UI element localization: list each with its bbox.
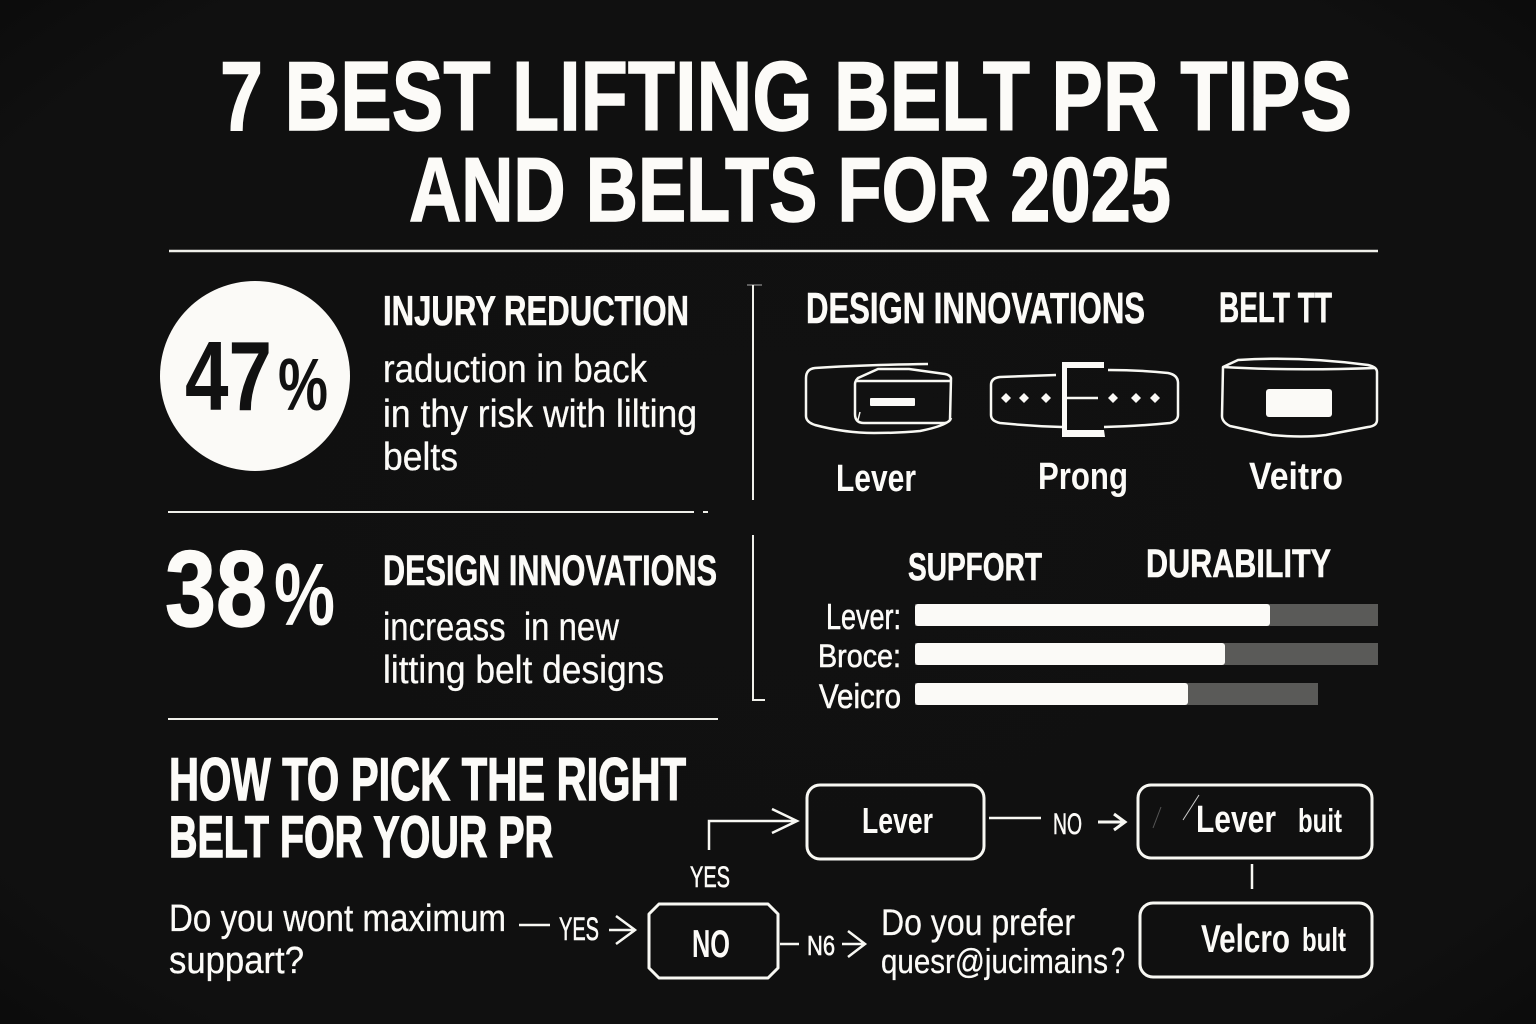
bar: velcro: Veicro	[819, 678, 901, 716]
panel: injury reduction	[160, 281, 697, 479]
heading: design innovations: DESIGN INNOVATIONS	[806, 284, 1145, 333]
box: velcro belt: Velcro	[1201, 918, 1290, 961]
text: innovation description: litting belt designs	[383, 649, 664, 692]
title: AND BELTS FOR 2025	[409, 140, 1171, 241]
stat circle: 47%: 47	[185, 321, 272, 431]
box: lever	[807, 785, 984, 859]
question: maximum support: suppart?	[169, 940, 304, 982]
icon: velcro belt	[1222, 359, 1377, 436]
box: velcro belt: bult	[1302, 921, 1346, 958]
box: lever: Lever	[862, 800, 933, 841]
question: prefer: quesr@jucimains	[881, 943, 1108, 981]
question: maximum support	[169, 898, 506, 982]
heading: belt type: BELT TT	[1219, 284, 1332, 332]
stat: 38%: %	[274, 545, 335, 644]
bar: brace: Broce:	[818, 638, 901, 674]
label: lever: Lever	[836, 458, 916, 500]
text: injury description: in thy risk with lilting	[383, 393, 697, 436]
arrow: no to lever belt: NO	[1053, 808, 1082, 841]
question: prefer: Do you prefer	[881, 902, 1075, 943]
stat: 38%: 38	[165, 528, 267, 649]
heading: support: SUPFORT	[908, 546, 1042, 589]
arrow: yes up to lever	[690, 809, 797, 894]
box: lever belt: Lever	[1196, 799, 1276, 841]
arrow: yes to no box	[519, 911, 635, 947]
panel: flowchart	[169, 746, 1372, 982]
box: no: NO	[692, 923, 730, 966]
bar chart: support and durability	[818, 542, 1378, 716]
bar: lever: Lever:	[826, 596, 901, 637]
arrow: yes up to lever: YES	[690, 861, 730, 894]
label: prong: Prong	[1038, 456, 1128, 498]
title	[220, 41, 1352, 241]
bar: velcro	[819, 678, 1318, 716]
stat circle: 47%: %	[278, 343, 328, 426]
text: injury description	[383, 348, 697, 479]
bar: brace	[818, 638, 1378, 674]
arrow: no to second question: N6	[807, 930, 835, 961]
panel: belt types	[806, 284, 1377, 500]
text: innovation description	[383, 606, 664, 692]
box: lever belt	[1138, 785, 1372, 858]
question: maximum support: Do you wont maximum	[169, 898, 506, 940]
arrow: no to second question	[780, 930, 865, 961]
heading: how to pick	[169, 746, 686, 870]
label: velcro: Veitro	[1249, 456, 1343, 498]
box: lever belt: buit	[1298, 802, 1342, 839]
question: prefer	[881, 902, 1125, 981]
box: no	[649, 904, 778, 978]
text: injury description: raduction in back	[383, 348, 647, 391]
stat circle: 47%	[160, 281, 350, 471]
bar: lever	[826, 596, 1378, 637]
panel: design innovations stat	[165, 528, 717, 692]
icon: prong belt	[991, 362, 1178, 437]
arrow: yes to no box: YES	[559, 911, 599, 947]
text: injury description: belts	[383, 436, 458, 479]
heading: injury reduction: INJURY REDUCTION	[383, 287, 689, 334]
arrow: no to lever belt	[989, 808, 1125, 841]
question: prefer: ?	[1111, 940, 1125, 981]
text: innovation description: increass in new	[383, 606, 620, 649]
heading: design innovations: DESIGN INNOVATIONS	[383, 547, 717, 595]
icon: lever belt	[806, 364, 951, 433]
heading: durability: DURABILITY	[1146, 542, 1331, 586]
box: velcro belt	[1140, 903, 1372, 977]
heading: how to pick: HOW TO PICK THE RIGHT	[169, 746, 686, 813]
heading: how to pick: BELT FOR YOUR PR	[169, 805, 553, 870]
